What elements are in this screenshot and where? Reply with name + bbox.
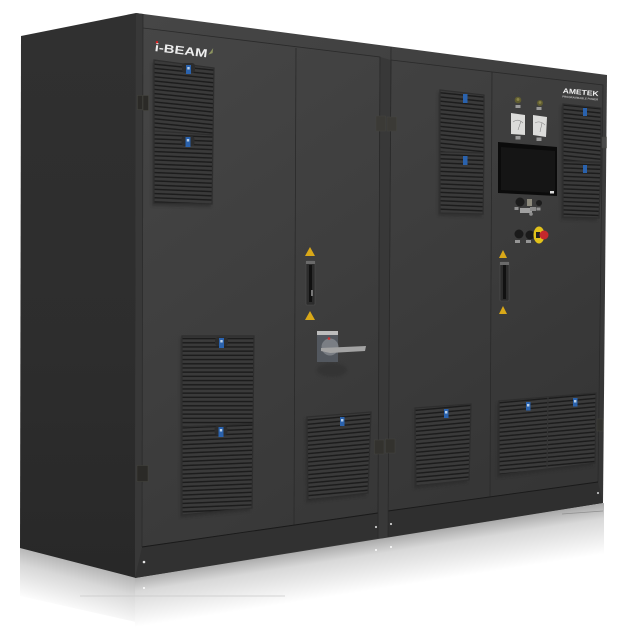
vent: lower left bottom [182,424,253,515]
vent: upper left bottom [154,131,213,204]
door handle: door four [500,262,509,301]
selector switches row [514,198,542,216]
pilot lights [515,97,543,110]
AMETEK logo: AMETEK [562,88,599,98]
emergency stop and push buttons [514,226,548,244]
vent: door three upper bottom [440,152,484,214]
floor reflection [20,503,604,630]
vent: door three bottom [415,404,471,486]
analog meters [511,113,547,141]
hinges [137,96,606,482]
plinth [135,513,378,578]
i-BEAM logo [154,41,213,61]
side post strip [135,13,143,578]
vent: door four upper bottom [563,161,601,218]
vent: door four upper top [563,104,601,162]
vent: door two bottom [307,412,371,500]
centre post [378,57,391,538]
i-BEAM logo: i-BEAM [154,42,208,60]
touch screen [498,142,557,196]
warning triangles [305,247,507,320]
door outlines [142,28,380,547]
vent: upper left top [154,60,214,135]
vent shadows [152,62,599,518]
fixing screws [143,561,145,563]
AMETEK logo [562,88,599,102]
main disconnect switch [317,331,366,377]
AMETEK logo: PROGRAMMABLE POWER [562,94,598,102]
vent: door four bottom double [499,393,596,475]
door handle: door two [306,261,315,305]
vent: lower left top [182,336,254,427]
cabinet front [135,13,607,578]
cabinet side panel [20,13,136,578]
vent: door three upper top [440,90,484,153]
